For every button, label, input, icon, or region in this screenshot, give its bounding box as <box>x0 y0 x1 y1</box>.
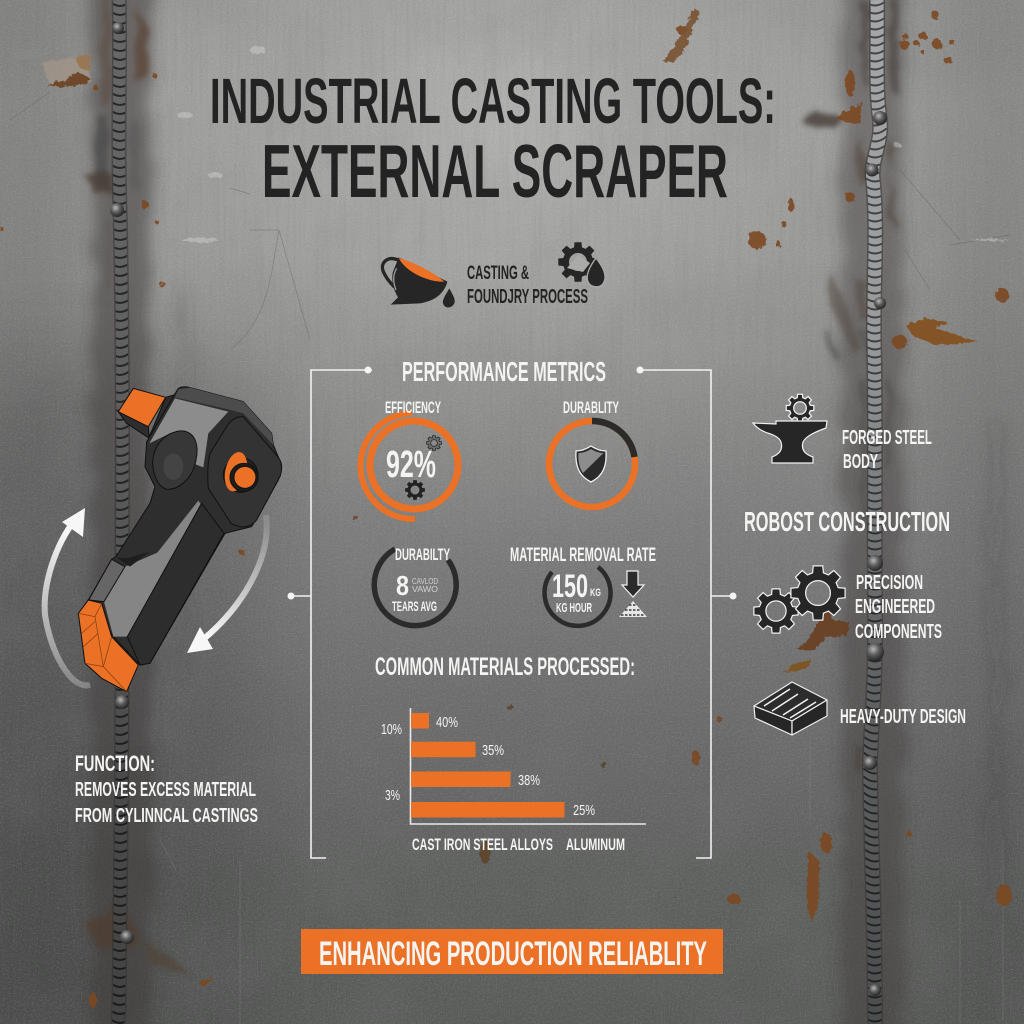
orange scraping tip <box>78 600 138 692</box>
metric: service life gauge: DURABILTY <box>395 546 450 564</box>
icon: anvil <box>753 421 827 463</box>
metric: material removal rate gauge: KG HOUR <box>556 600 592 615</box>
metric: service life gauge: TEARS AVG <box>392 598 437 614</box>
octagonal head <box>208 417 282 527</box>
orange bolt <box>221 450 258 493</box>
feature: forged steel body <box>753 394 932 473</box>
weld bolts <box>110 22 134 944</box>
text block: function: REMOVES EXCESS MATERIAL <box>75 779 256 801</box>
metric: service life gauge: VAWO <box>412 585 438 594</box>
text: casting and foundry: FOUNDJRY PROCESS <box>467 286 588 308</box>
weld seam: right <box>863 0 887 1024</box>
frame bracket <box>291 370 732 858</box>
weld seam: left <box>110 0 134 1024</box>
light strip face <box>104 501 201 637</box>
arrow: rotation up <box>45 508 90 685</box>
text: forged steel body <box>842 427 932 473</box>
metric: material removal rate gauge: 150 <box>552 568 588 604</box>
dark lower face <box>127 503 224 665</box>
heading: common materials: COMMON MATERIALS PROCESSED: <box>375 653 635 681</box>
feature: heavy-duty design <box>754 682 966 735</box>
icon: meshed gears <box>754 566 845 633</box>
metric: material removal rate gauge: MATERIAL REMOVAL RATE <box>510 544 656 566</box>
text: precision engineered components: PRECISION <box>856 572 923 594</box>
icon: outlined small gear <box>427 436 441 450</box>
text block: function <box>75 751 258 827</box>
icon: down arrow <box>622 571 644 597</box>
icon: gear and oil drop <box>558 242 605 287</box>
bar chart <box>381 708 646 854</box>
arrow: rotation down <box>187 515 267 653</box>
bar chart: 40% <box>436 714 458 731</box>
metric: material removal rate gauge: KG <box>590 587 601 599</box>
bar chart: 35% <box>482 742 504 759</box>
metric: durability shield gauge <box>549 399 635 507</box>
metric: efficiency gauge <box>360 399 458 519</box>
tool illustration: external scraper with rotation arrows <box>45 387 282 692</box>
banner: enhancing production reliability: ENHANCING PRODUCTION RELIABLITY <box>319 935 707 973</box>
text block: function: FUNCTION: <box>75 751 155 776</box>
bar chart: CAST IRON STEEL ALLOYS <box>412 835 553 854</box>
text: precision engineered components <box>855 572 942 643</box>
text: casting and foundry <box>467 263 588 308</box>
banner: enhancing production reliability <box>301 929 723 974</box>
weld bolts <box>863 111 887 996</box>
metric: durability shield gauge: DURABLITY <box>563 399 619 417</box>
bar chart: ALUMINUM <box>566 835 625 854</box>
heading: performance metrics: PERFORMANCE METRICS <box>402 356 606 387</box>
metric: material removal rate gauge <box>510 544 656 626</box>
light top face <box>149 398 228 467</box>
text: precision engineered components: ENGINEERED <box>855 596 935 618</box>
icon: gear above anvil <box>786 394 814 422</box>
metric: efficiency gauge: 92% <box>386 444 436 486</box>
text: forged steel body: FORGED STEEL <box>842 427 932 449</box>
icon: shield <box>576 446 606 482</box>
bar chart: 38% <box>518 772 540 789</box>
main body silhouette <box>88 387 282 665</box>
text: forged steel body: BODY <box>843 451 878 473</box>
orange handle tab <box>118 388 174 438</box>
text: casting and foundry: CASTING & <box>467 263 529 284</box>
metric: service life gauge: CAVLOD <box>412 577 438 586</box>
text block: function: FROM CYLINNCAL CASTINGS <box>75 805 258 827</box>
icon: pouring crucible <box>382 257 455 307</box>
title <box>210 65 776 213</box>
text: precision engineered components: COMPONENTS <box>855 621 942 643</box>
icon: ribbed steel block <box>754 682 827 735</box>
casting and foundry process header <box>382 242 605 308</box>
panel: performance metrics <box>288 356 736 858</box>
scraper body <box>78 387 282 692</box>
hole recess <box>153 431 197 489</box>
metric: service life gauge: 8 <box>396 570 409 601</box>
feature: precision components <box>754 566 942 643</box>
icon: dark gear <box>405 480 425 500</box>
bar chart: 25% <box>573 802 595 819</box>
metric: service life gauge <box>374 546 456 626</box>
metric: efficiency gauge: EFFICIENCY <box>385 399 441 417</box>
bar chart: 10% <box>381 721 402 738</box>
burn marks around the welds <box>85 0 898 975</box>
icon: material pile <box>619 601 647 617</box>
frame dots <box>288 366 736 600</box>
bar chart: 3% <box>385 787 400 804</box>
